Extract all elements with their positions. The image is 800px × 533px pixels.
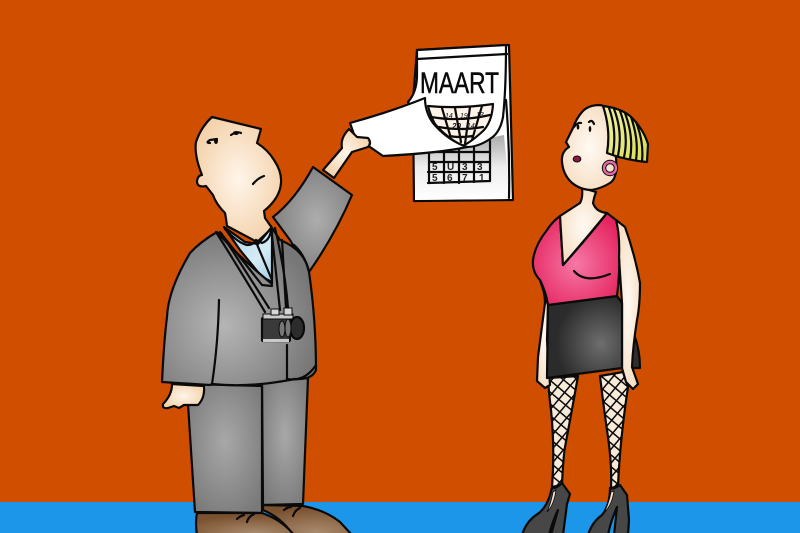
camera strap bbox=[216, 226, 288, 312]
woman skirt bbox=[547, 296, 622, 378]
man far leg bbox=[262, 378, 308, 505]
man raised forearm and hand bbox=[323, 129, 370, 178]
woman left shoe skin bbox=[547, 490, 556, 512]
calendar lower grid: 7 bbox=[462, 173, 468, 184]
woman right leg fishnet bbox=[600, 372, 628, 488]
woman right shoe skin bbox=[604, 491, 614, 513]
calendar lower grid: 3 bbox=[462, 162, 468, 173]
jacket details bbox=[212, 232, 316, 384]
man far shoe bbox=[263, 505, 352, 533]
floor bbox=[0, 502, 800, 533]
camera bbox=[262, 308, 304, 342]
man shirt bbox=[224, 227, 276, 282]
man face bbox=[208, 131, 264, 184]
woman right arm bbox=[616, 220, 640, 389]
calendar lower grid: 6 bbox=[447, 173, 453, 184]
woman left arm bbox=[537, 280, 550, 388]
curl underside grid: 14 bbox=[467, 123, 475, 130]
man bbox=[162, 117, 370, 533]
man raised sleeve bbox=[273, 167, 352, 272]
calendar bbox=[350, 45, 513, 201]
curl underside grid bbox=[428, 104, 493, 146]
calendar lower grid: 1 bbox=[479, 173, 485, 184]
curl digits: 14 bbox=[445, 113, 453, 120]
calendar lower grid bbox=[428, 141, 490, 184]
man head and neck bbox=[196, 117, 281, 242]
woman left shoe bbox=[522, 483, 570, 533]
curl underside grid: 20 bbox=[451, 122, 461, 131]
torn sheet in hand bbox=[350, 98, 467, 156]
curl underside grid: 13 bbox=[476, 112, 484, 119]
woman back skirt bbox=[620, 325, 640, 368]
woman right shoe bbox=[588, 485, 629, 533]
woman pink top bbox=[533, 213, 619, 305]
calendar back page bbox=[413, 45, 513, 201]
woman head bbox=[562, 105, 616, 190]
man collar bbox=[225, 229, 272, 280]
woman left leg fishnet bbox=[548, 376, 578, 487]
month title: MAART bbox=[420, 67, 499, 100]
calendar side edge bbox=[506, 100, 509, 198]
calendar lower grid: 3 bbox=[477, 162, 483, 173]
page shadow bbox=[415, 135, 510, 200]
calendar lower grid: U bbox=[447, 162, 454, 173]
woman hair bbox=[603, 106, 648, 162]
woman chest and neck bbox=[560, 188, 607, 265]
calendar curled page bbox=[408, 45, 506, 147]
calendar digits: 5 bbox=[432, 162, 438, 173]
woman bbox=[522, 105, 648, 533]
woman face bbox=[573, 121, 594, 162]
man jacket bbox=[162, 228, 316, 385]
woman earring colour bbox=[604, 162, 616, 174]
calendar lower grid: 5 bbox=[432, 173, 438, 184]
woman top fold bbox=[574, 271, 610, 278]
man lower hand bbox=[163, 384, 204, 408]
calendar binding line bbox=[417, 54, 507, 59]
woman earring bbox=[604, 162, 616, 174]
curl underside grid: 19 bbox=[460, 113, 468, 120]
man near shoe bbox=[196, 513, 294, 533]
man near leg bbox=[188, 384, 262, 513]
